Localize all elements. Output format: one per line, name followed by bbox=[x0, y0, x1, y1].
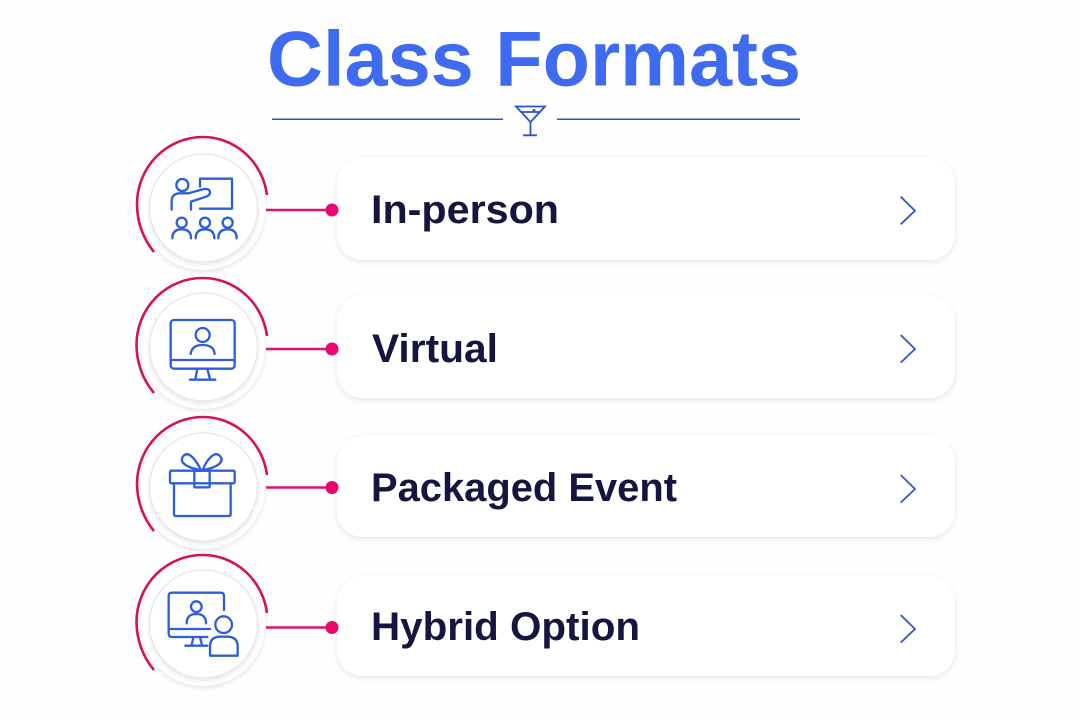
card: Virtual bbox=[372, 327, 498, 371]
card: In-person bbox=[371, 188, 559, 232]
connector and medallion bbox=[136, 555, 338, 686]
connector and medallion bbox=[136, 278, 338, 409]
card bbox=[337, 295, 955, 398]
card bbox=[337, 436, 955, 537]
card bbox=[337, 158, 955, 260]
icon: gift box bbox=[170, 454, 235, 516]
connector and medallion bbox=[137, 137, 338, 270]
title divider with cocktail icon bbox=[272, 106, 800, 135]
card: Hybrid Option bbox=[371, 605, 640, 649]
row: Hybrid Option bbox=[136, 555, 955, 686]
connector and medallion bbox=[137, 417, 338, 549]
card bbox=[337, 576, 955, 676]
row: Packaged Event bbox=[137, 417, 955, 549]
icon: video call on monitor bbox=[171, 320, 235, 380]
title: Class Formats bbox=[267, 14, 801, 102]
icon: monitor with in-room person bbox=[169, 593, 238, 656]
icon: presenter and audience bbox=[172, 179, 237, 238]
row: In-person bbox=[137, 137, 955, 270]
row: Virtual bbox=[136, 278, 955, 409]
card: Packaged Event bbox=[371, 466, 677, 510]
